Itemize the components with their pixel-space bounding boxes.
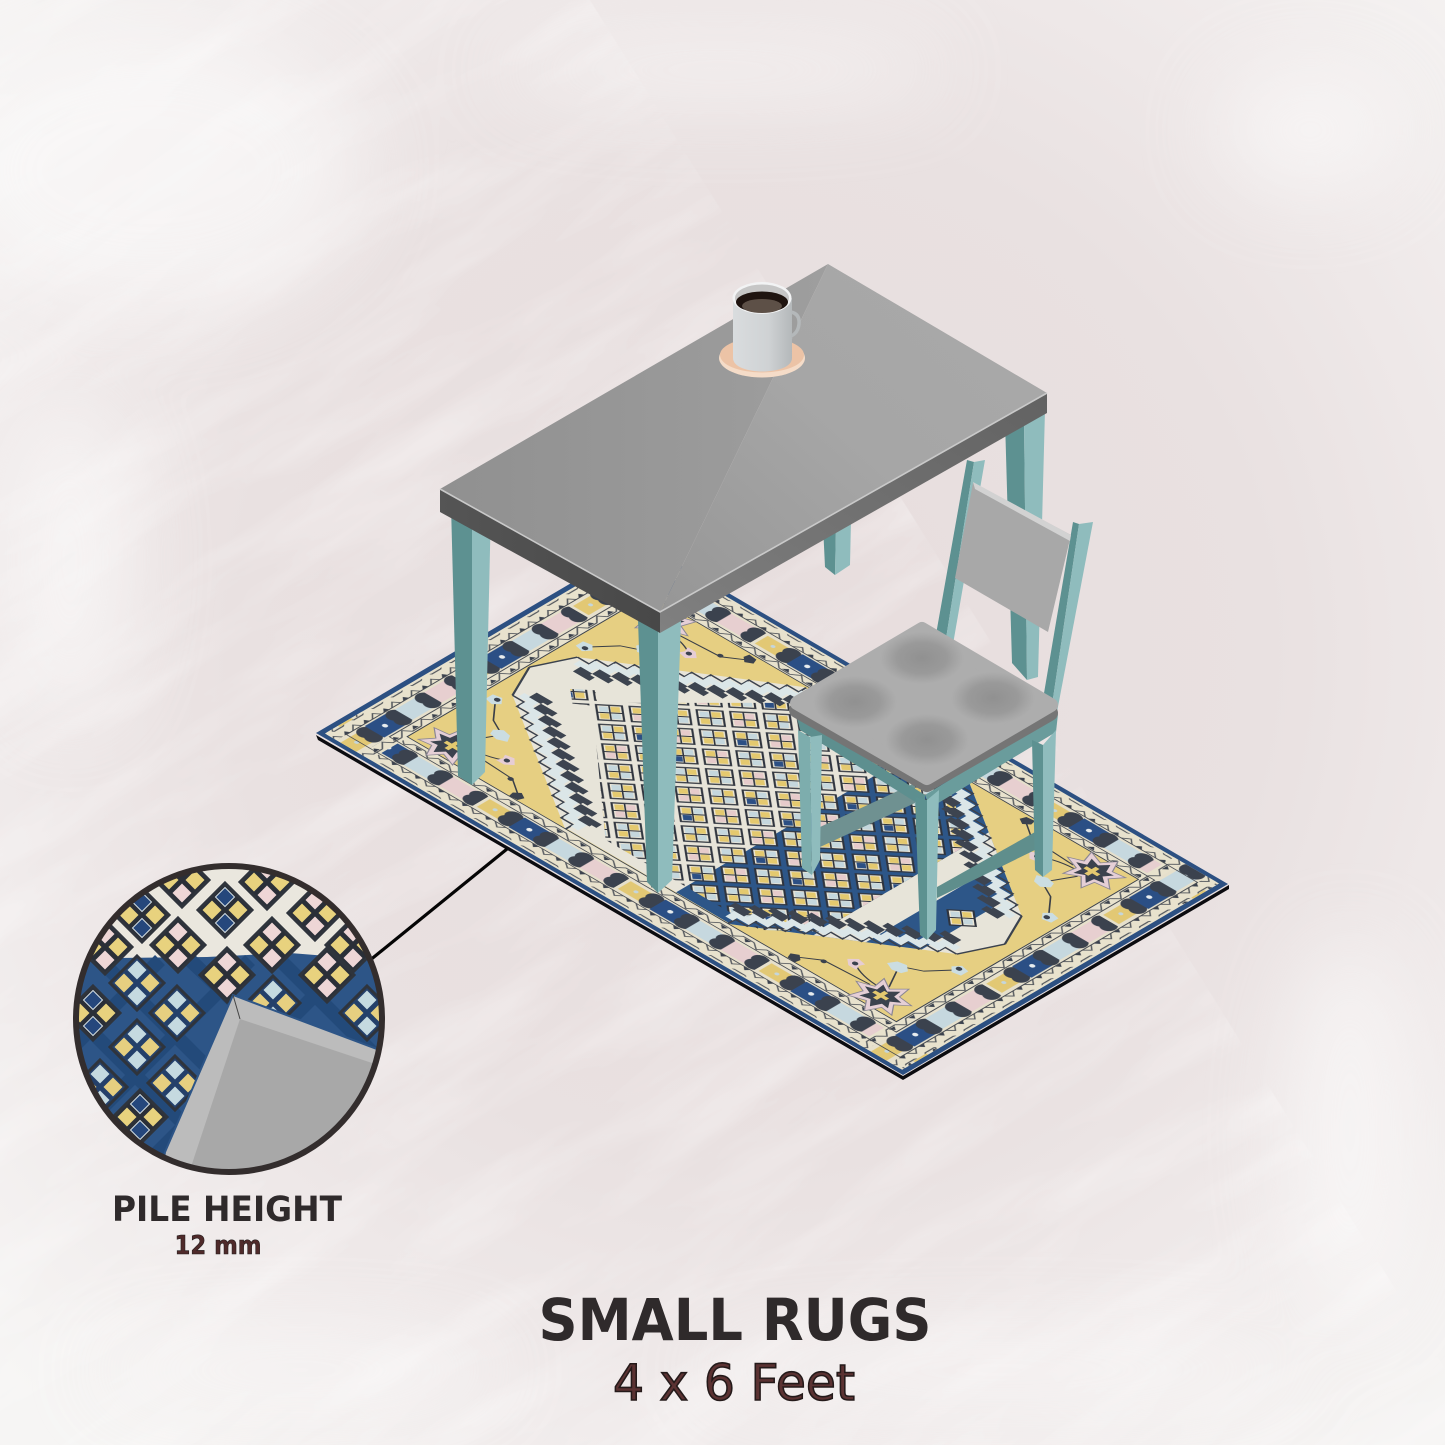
table top	[440, 264, 1047, 633]
lens: diamond clusters	[79, 870, 379, 1142]
rug	[316, 566, 1229, 1080]
chair back right post	[1042, 522, 1093, 712]
chair back left post	[935, 460, 985, 650]
lens: folded grey backing	[164, 994, 376, 1169]
chair stretchers	[820, 783, 1035, 898]
chair seat	[797, 629, 1051, 784]
rug drop shadow	[316, 735, 1229, 1080]
label: pile height	[112, 1190, 342, 1261]
table front centre leg	[638, 620, 681, 893]
chair apron	[796, 714, 1058, 808]
title: small rugs	[538, 1286, 932, 1412]
lens: blue pile	[79, 953, 378, 1148]
connector line	[369, 849, 507, 961]
rug central medallion	[512, 657, 1022, 954]
chair right leg	[1032, 730, 1056, 877]
title: small rugs: 4 x 6 Feet	[613, 1354, 855, 1412]
chair back panel	[955, 482, 1071, 632]
lens: lattice stripes	[80, 955, 376, 1154]
table front left leg	[451, 505, 491, 785]
table back leg	[823, 520, 851, 575]
coffee mug on coaster	[719, 282, 805, 378]
table	[440, 264, 1047, 893]
chair	[796, 460, 1093, 940]
rug stepped edges	[409, 596, 1125, 1015]
mug	[732, 282, 799, 372]
detail lens: pile height close-up	[73, 863, 385, 1175]
table far right leg	[1005, 410, 1045, 680]
chair front left leg	[798, 730, 822, 875]
seat dents	[813, 632, 1035, 766]
chair front centre leg	[915, 790, 939, 940]
coaster	[719, 338, 805, 378]
label: pile height: PILE HEIGHT	[112, 1190, 342, 1230]
rug yellow corners	[407, 594, 1138, 1022]
title: small rugs: SMALL RUGS	[538, 1286, 932, 1354]
rug border	[316, 566, 1228, 1075]
label: pile height: 12 mm	[174, 1231, 262, 1261]
